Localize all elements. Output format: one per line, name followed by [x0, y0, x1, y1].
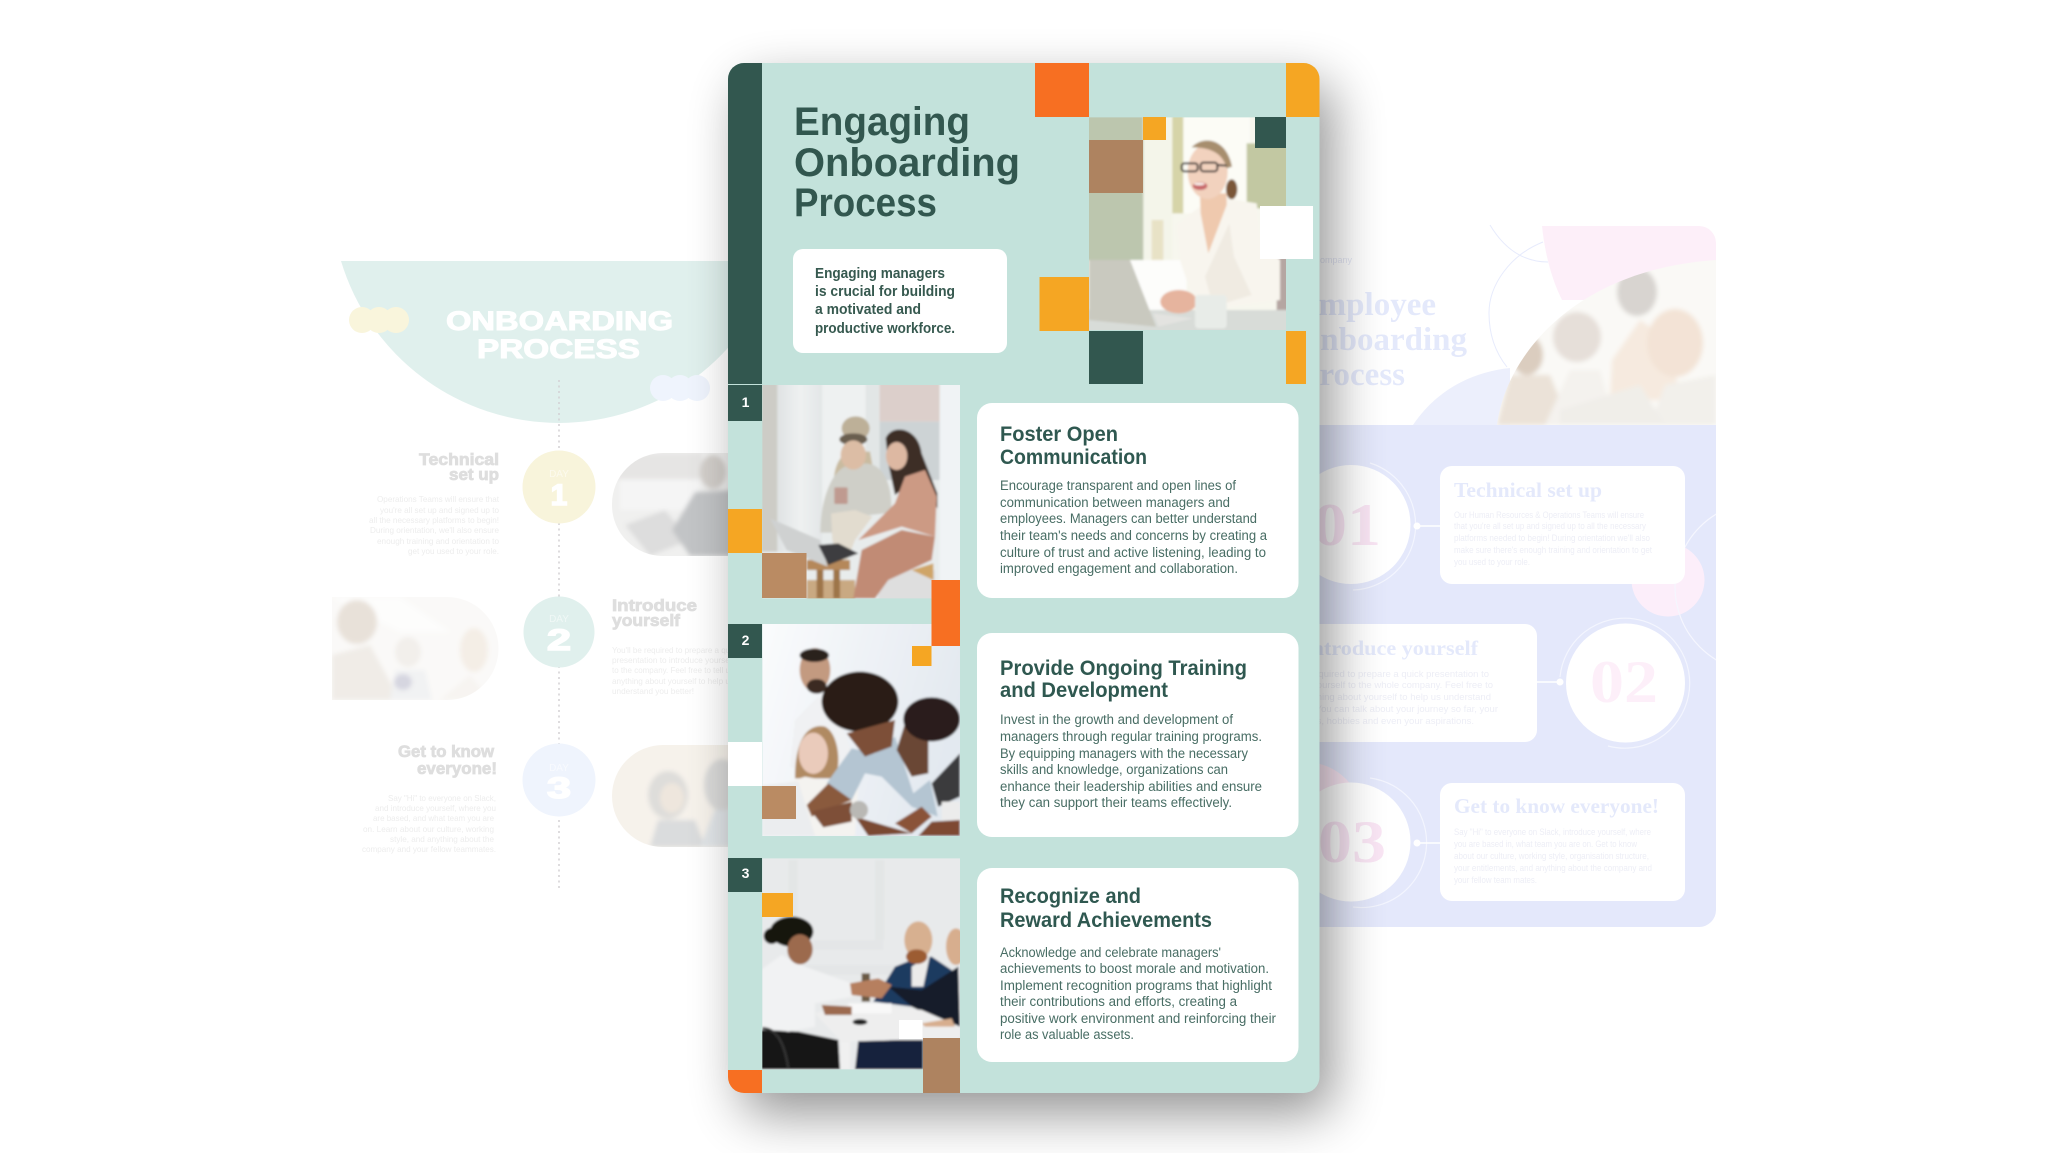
right panel title: Process: [1299, 357, 1405, 393]
day 1 badge: 1: [551, 479, 567, 512]
company label: Company: [1313, 255, 1352, 265]
text card 2: ongoing training and development: managers through regular training programs.: [1000, 729, 1262, 745]
panel: faded employee onboarding process (right): [1320, 225, 1716, 927]
introduce yourself heading: Introduce: [612, 596, 697, 615]
brown block on photo 3: [923, 1038, 960, 1093]
panel: faded onboarding timeline (left): [332, 261, 728, 888]
text card 3: recognize and reward achievements: Acknowledge and celebrate managers': [1000, 945, 1221, 961]
technical set up text: [369, 494, 500, 556]
step 03: you are based in, what team you are on. Get to know: [1454, 839, 1637, 850]
blue pill decoration: [650, 375, 710, 401]
text card 3: recognize and reward achievements: Reward Achievements: [1000, 908, 1212, 932]
text card 3: recognize and reward achievements: Implement recognition programs that highlight: [1000, 978, 1272, 994]
number badge 2: 2: [742, 632, 750, 648]
get to know everyone text: style, and anything about the: [390, 834, 494, 844]
right panel title: Onboarding: [1295, 322, 1467, 358]
step 03: Say "Hi" to everyone on Slack, introduce yourself, where: [1454, 827, 1651, 838]
text card 3: recognize and reward achievements: achievements to boost morale and motivation.: [1000, 961, 1269, 977]
heading: main title: Process: [794, 181, 937, 225]
technical set up text: During orientation, we'll also ensure: [370, 525, 499, 535]
pink circles: [1320, 514, 1716, 792]
text card 2: ongoing training and development: enhance their leadership abilities and ensure: [1000, 779, 1262, 795]
day 1 badge: [522, 450, 596, 524]
technical set up heading: set up: [449, 465, 499, 484]
white block beside photo 2: [728, 742, 762, 786]
main card shadow: [742, 84, 1332, 1114]
photo: team around a laptop (faded): [1490, 255, 1720, 427]
number badge 2: [728, 624, 762, 658]
technical set up text: Operations Teams will ensure that: [377, 494, 500, 504]
technical set up text: you're all set up and signed up to: [380, 505, 499, 515]
text card 3: recognize and reward achievements: [977, 868, 1298, 1062]
day 3 badge: DAY: [549, 763, 569, 774]
day 2 badge: DAY: [549, 614, 569, 625]
step 01: Our Human Resources & Operations Teams will ensure: [1454, 510, 1644, 521]
text card 3: recognize and reward achievements: Recognize and: [1000, 884, 1141, 908]
step 02: tell us anything about yourself to help us understand: [1271, 692, 1491, 703]
get to know everyone text: [362, 793, 496, 854]
white block on photo: [1260, 206, 1313, 259]
dark block under photo: [1089, 331, 1143, 384]
day 1 badge: DAY: [549, 469, 569, 480]
step 02: You'll be required to prepare a quick presentation to: [1272, 669, 1489, 680]
small amber block on photo: [1143, 117, 1166, 140]
introduce yourself text: [612, 645, 741, 696]
text card 1: foster open communication: Foster Open: [1000, 422, 1118, 446]
number badge 1: [728, 385, 762, 421]
get to know everyone text: and introduce yourself, where you: [375, 803, 496, 813]
dark block on photo: [1255, 117, 1286, 148]
text card 3: recognize and reward achievements: their contributions and efforts, creating a: [1000, 994, 1237, 1010]
intro callout: a motivated and: [815, 301, 921, 318]
step 2 photo: team around a screen: [758, 621, 963, 839]
photo: man at sofa (faded): [612, 453, 728, 556]
step 03: about our culture, working style, organisation structure,: [1454, 851, 1649, 862]
get to know everyone text: are based, and what team you are: [373, 813, 494, 823]
step 01: you used to your role.: [1454, 557, 1530, 568]
introduce yourself text: anything about yourself to help us: [612, 676, 734, 686]
heading: main title: [796, 106, 1018, 216]
intro callout: [793, 249, 1007, 353]
card background: [728, 63, 1320, 1093]
text card 1: foster open communication: Encourage transparent and open lines of: [1000, 478, 1236, 494]
introduce yourself text: understand you better!: [612, 686, 694, 696]
get to know everyone text: Say "Hi" to everyone on Slack,: [388, 793, 496, 803]
step 02: experiences, hobbies and even your aspirations.: [1270, 716, 1474, 727]
text card 1: foster open communication: culture of trust and active listening, leading to: [1000, 545, 1266, 561]
step 01: that you're all set up and signed up to all the necessary: [1454, 521, 1646, 532]
number badge 3: 3: [742, 865, 750, 881]
left panel title: ONBOARDING: [446, 306, 673, 336]
step 03: 03: [1318, 809, 1386, 875]
step 03: your entitlements, and anything about the company and: [1454, 863, 1652, 874]
day 3 badge: 3: [547, 772, 571, 805]
get to know everyone text: on. Learn about our culture, working: [363, 824, 494, 834]
intro callout: is crucial for building: [815, 283, 955, 300]
amber block on photo 3: [762, 893, 793, 917]
step 03: Get to know everyone!: [1454, 794, 1659, 818]
panel: main infographic card: [728, 63, 1320, 1093]
step 02: introduce yourself to the whole company. Feel free to: [1270, 680, 1493, 691]
light blue circle: [1413, 368, 1510, 425]
orange block top: [1035, 63, 1089, 117]
intro callout: Engaging managers: [815, 265, 945, 282]
step 03: your fellow team mates.: [1454, 875, 1537, 886]
text card 3: recognize and reward achievements: role as valuable assets.: [1000, 1027, 1134, 1043]
yellow pill decoration: [349, 307, 409, 333]
amber block beside photo 1: [728, 509, 762, 553]
text card 2: ongoing training and development: Provide Ongoing Training: [1000, 656, 1247, 680]
right panel title: [1295, 287, 1467, 393]
step 3 photo: handshake at meeting table: [758, 855, 966, 1073]
intro callout: productive workforce.: [815, 320, 955, 337]
text card 1: foster open communication: improved engagement and collaboration.: [1000, 561, 1238, 577]
introduce yourself heading: yourself: [612, 611, 680, 630]
introduce yourself text: You'll be required to prepare a quick: [612, 645, 741, 655]
step 03: [1292, 778, 1685, 908]
heading: main title: Onboarding: [794, 141, 1020, 185]
step 01: [1292, 463, 1685, 590]
text card 2: ongoing training and development: By equipping managers with the necessary: [1000, 746, 1249, 762]
introduce yourself heading: [612, 596, 697, 630]
step 01: 01: [1313, 492, 1381, 558]
technical set up heading: [419, 450, 499, 484]
introduce yourself text: to the company. Feel free to tell us: [612, 665, 734, 675]
orange corner block: [728, 1070, 762, 1093]
day 3 badge: [522, 744, 596, 816]
text card 1: foster open communication: communication between managers and: [1000, 495, 1230, 511]
text card 2: ongoing training and development: and Development: [1000, 678, 1168, 702]
technical set up heading: Technical: [419, 450, 499, 469]
right panel title: Employee: [1297, 287, 1436, 323]
brown block on photo 2: [762, 786, 796, 819]
thin ring arcs: [1489, 225, 1548, 367]
text card 1: foster open communication: [977, 403, 1298, 598]
text card 1: foster open communication: their team's needs and concerns by creating a: [1000, 528, 1267, 544]
brown block on photo: [1089, 140, 1143, 193]
get to know everyone heading: [398, 742, 497, 778]
introduce yourself text: presentation to introduce yourself: [612, 655, 735, 665]
day 2 badge: 2: [547, 624, 571, 657]
text card 2: ongoing training and development: [977, 633, 1298, 837]
amber block left of photo: [1040, 277, 1089, 331]
step 1 photo: two women at laptop: [758, 382, 963, 602]
small amber block on photo 2: [912, 646, 932, 666]
left panel title: [446, 306, 673, 364]
text card 3: recognize and reward achievements: positive work environment and reinforcing their: [1000, 1011, 1276, 1027]
text card 1: foster open communication: Communication: [1000, 445, 1147, 469]
step 02: [1268, 618, 1690, 748]
text card 2: ongoing training and development: Invest in the growth and development of: [1000, 712, 1233, 728]
photo: smiling colleagues (faded): [612, 745, 728, 847]
dark side strip: [728, 63, 762, 384]
step 02: Introduce yourself: [1303, 636, 1479, 660]
step 01: platforms needed to begin! During orientation we'll also: [1454, 533, 1650, 544]
left panel title: PROCESS: [477, 334, 640, 364]
technical set up text: enough training and orientation to: [377, 536, 499, 546]
technical set up text: all the necessary platforms to begin!: [369, 515, 499, 525]
get to know everyone text: company and your fellow teammates.: [362, 844, 496, 854]
amber block top right: [1286, 63, 1320, 117]
heading: main title: Engaging: [794, 100, 970, 144]
technical set up text: get you used to your role.: [408, 546, 499, 556]
day 2 badge: [524, 596, 594, 668]
text card 1: foster open communication: employees. Managers can better understand: [1000, 511, 1257, 527]
get to know everyone heading: Get to know: [398, 742, 495, 761]
number badge 1: 1: [742, 394, 750, 410]
text card 2: ongoing training and development: they can support their teams effectively.: [1000, 795, 1232, 811]
step 01: make sure there's enough training and orientation to get: [1454, 545, 1652, 556]
lavender panel: [1290, 425, 1716, 927]
photo: smiling businesswoman at laptop: [1083, 113, 1290, 333]
number badge 3: [728, 858, 762, 892]
step 02: 02: [1590, 649, 1658, 715]
text card 2: ongoing training and development: skills and knowledge, organizations can: [1000, 762, 1228, 778]
photo: colleagues greeting (faded): [332, 598, 492, 700]
brown block on photo 1: [762, 553, 806, 598]
white block on photo 3: [899, 1020, 922, 1039]
amber block under photo: [1286, 331, 1306, 384]
step 02: you better! You can talk about your journey so far, your: [1268, 704, 1498, 715]
pink corner shape: [1542, 226, 1716, 300]
step 01: Technical set up: [1454, 478, 1602, 502]
get to know everyone heading: everyone!: [417, 759, 497, 778]
orange block on photo 2: [932, 580, 960, 646]
header arc shape: [341, 261, 777, 423]
